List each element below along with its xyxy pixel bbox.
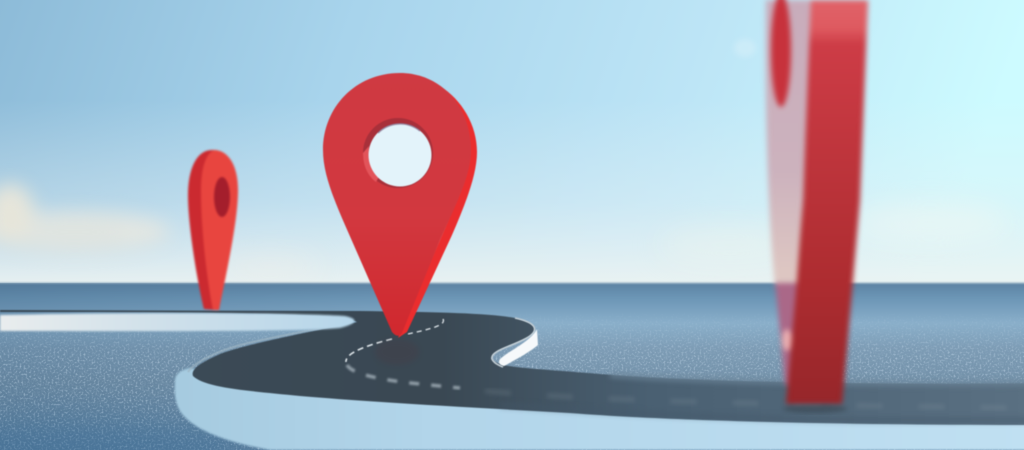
white kerb strip xyxy=(499,329,538,366)
centre line dashes xyxy=(408,319,443,334)
pin hole xyxy=(368,124,432,186)
road rim line xyxy=(492,318,535,367)
pale inner face xyxy=(766,0,813,285)
main pin xyxy=(323,73,477,338)
road upper-left rim xyxy=(188,322,352,372)
road surface xyxy=(0,310,1024,425)
pin face xyxy=(323,73,471,336)
left pin (blurred, distant) xyxy=(188,150,238,310)
pin reflection on road xyxy=(375,339,419,365)
outer band xyxy=(786,0,868,404)
sky xyxy=(0,0,1024,286)
right pin shadow xyxy=(783,405,847,413)
right pin (close, out of focus) xyxy=(766,0,868,404)
ground xyxy=(0,281,1024,450)
left pin hole xyxy=(214,177,230,217)
hole in face xyxy=(771,0,791,107)
soft road edges, right side xyxy=(500,375,1024,420)
clouds xyxy=(0,39,1010,278)
road xyxy=(0,310,1024,450)
far white island xyxy=(0,313,354,331)
pin side edge xyxy=(398,86,477,338)
left pin side xyxy=(188,150,216,310)
left pin face xyxy=(201,150,238,310)
pin hole wall xyxy=(363,118,433,188)
road white edge xyxy=(175,368,1024,450)
